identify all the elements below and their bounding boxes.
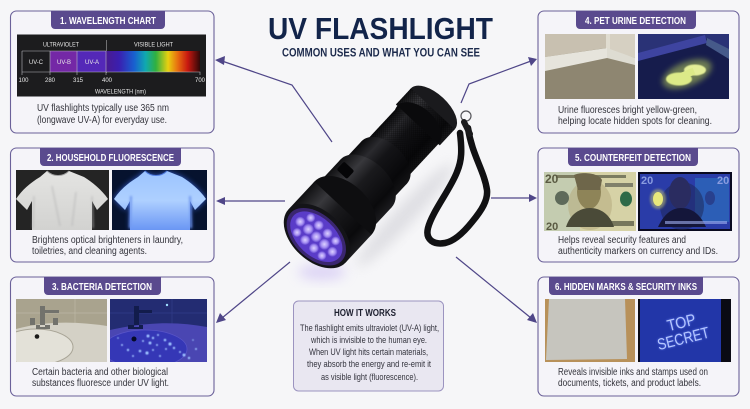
description 4: helping locate hidden spots for cleaning.	[558, 116, 712, 127]
panel: bacteria detection	[0, 277, 214, 396]
heading tab 3: 3. BACTERIA DETECTION	[52, 282, 152, 293]
description 5: authenticity markers on currency and IDs.	[558, 246, 718, 257]
spectrum chart: UV-C	[29, 60, 44, 66]
panel: counterfeit detection	[538, 148, 739, 262]
heading tab 5: 5. COUNTERFEIT DETECTION	[575, 153, 691, 164]
spectrum chart: 280	[45, 78, 56, 84]
spectrum chart: VISIBLE LIGHT	[134, 42, 173, 48]
photo: blank paper on wood	[545, 299, 635, 362]
heading tab 2: 2. HOUSEHOLD FLUORESCENCE	[47, 153, 174, 164]
flashlight body	[271, 73, 473, 281]
photo: twenty dollar bill	[544, 172, 636, 233]
description 2: toiletries, and cleaning agents.	[32, 246, 147, 257]
panel: wavelength chart	[10, 11, 214, 133]
photo: bill under UV: 20	[717, 175, 729, 187]
arrow: to bacteria detection	[216, 262, 290, 323]
photo: carpet in daylight	[545, 34, 635, 99]
spectrum chart	[17, 34, 206, 96]
photo: twenty dollar bill: 20	[545, 172, 559, 186]
panel: pet urine detection	[538, 11, 739, 133]
description 5	[558, 235, 718, 257]
heading tab 1	[51, 11, 165, 29]
UV LEDs	[286, 207, 346, 266]
how it works heading: HOW IT WORKS	[334, 308, 396, 319]
title: UV FLASHLIGHT	[268, 11, 493, 46]
tail cap	[396, 77, 465, 145]
description 2: Brightens optical brighteners in laundry,	[32, 235, 183, 246]
description 6: documents, tickets, and product labels.	[558, 378, 701, 389]
how it works text: they absorb the energy and re-emit it	[307, 359, 431, 370]
subtitle: COMMON USES AND WHAT YOU CAN SEE	[282, 46, 480, 60]
panel: how it works	[294, 301, 444, 391]
spectrum chart: 400	[102, 78, 113, 84]
heading tab 1: 1. WAVELENGTH CHART	[60, 16, 156, 27]
photo: fluorescing t-shirt	[112, 170, 207, 230]
how it works text: as visible light (fluorescence).	[321, 372, 418, 383]
description 5: Helps reveal security features and	[558, 235, 686, 246]
spectrum chart: UV-B	[57, 60, 71, 66]
description 4	[558, 105, 712, 127]
description 1: UV flashlights typically use 365 nm	[37, 103, 169, 114]
lanyard strap	[427, 111, 487, 243]
photo: sink under UV	[110, 299, 207, 362]
heading tab 4	[576, 11, 696, 29]
collars	[317, 125, 424, 232]
photo: top secret under UV	[638, 299, 731, 362]
heading tab 6	[549, 277, 703, 295]
arrow: to counterfeit detection	[491, 194, 537, 202]
photo: top secret under UV: TOP	[665, 312, 698, 335]
photo: bill under UV	[638, 172, 732, 231]
spectrum chart: 700	[195, 78, 206, 84]
heading tab 6: 6. HIDDEN MARKS & SECURITY INKS	[555, 282, 697, 293]
description 3: Certain bacteria and other biological	[32, 367, 168, 378]
photo: carpet under UV	[638, 34, 729, 99]
description 2	[32, 235, 183, 257]
arrow: to hidden marks	[456, 257, 537, 323]
spectrum chart: WAVELENGTH (nm)	[95, 90, 146, 96]
how it works text: When UV light hits certain materials,	[309, 347, 428, 358]
description 3	[32, 367, 169, 389]
photo: twenty dollar bill: 20	[546, 221, 558, 233]
heading tab 2	[40, 148, 181, 166]
how it works text: which is invisible to the human eye.	[310, 335, 427, 346]
how it works text	[300, 323, 439, 383]
description 1: (longwave UV-A) for everyday use.	[37, 115, 167, 126]
arrow: to wavelength chart	[215, 56, 332, 142]
description 1	[37, 103, 169, 126]
photo: top secret under UV: SECRET	[656, 325, 711, 354]
spectrum chart: UV-A	[85, 60, 99, 66]
spectrum chart: 315	[73, 78, 84, 84]
photo: top secret under UV: TOP	[665, 312, 698, 335]
heading tab 3	[44, 277, 161, 295]
heading tab 5	[568, 148, 698, 166]
photo: top secret under UV: SECRET	[656, 325, 711, 354]
how it works text: The flashlight emits ultraviolet (UV-A) light,	[300, 323, 439, 334]
photo: bill under UV: 20	[641, 175, 653, 187]
description 4: Urine fluoresces bright yellow-green,	[558, 105, 697, 116]
photo: sink in daylight	[16, 299, 107, 362]
flashlight illustration	[271, 73, 487, 281]
photo: white t-shirt	[16, 170, 109, 230]
heading tab 4: 4. PET URINE DETECTION	[585, 16, 686, 27]
description 6	[558, 367, 708, 389]
panel: household fluorescence	[10, 148, 214, 262]
arrow: to household fluorescence	[216, 197, 285, 205]
spectrum chart: 100	[18, 78, 29, 84]
knurled grip	[363, 93, 450, 181]
arrow: to pet urine detection	[461, 57, 537, 103]
panel: hidden marks and security inks	[538, 277, 739, 396]
description 6: Reveals invisible inks and stamps used on	[558, 367, 708, 378]
description 3: substances fluoresce under UV light.	[32, 378, 169, 389]
head	[271, 163, 388, 281]
spectrum chart: ULTRAVIOLET	[43, 42, 79, 48]
